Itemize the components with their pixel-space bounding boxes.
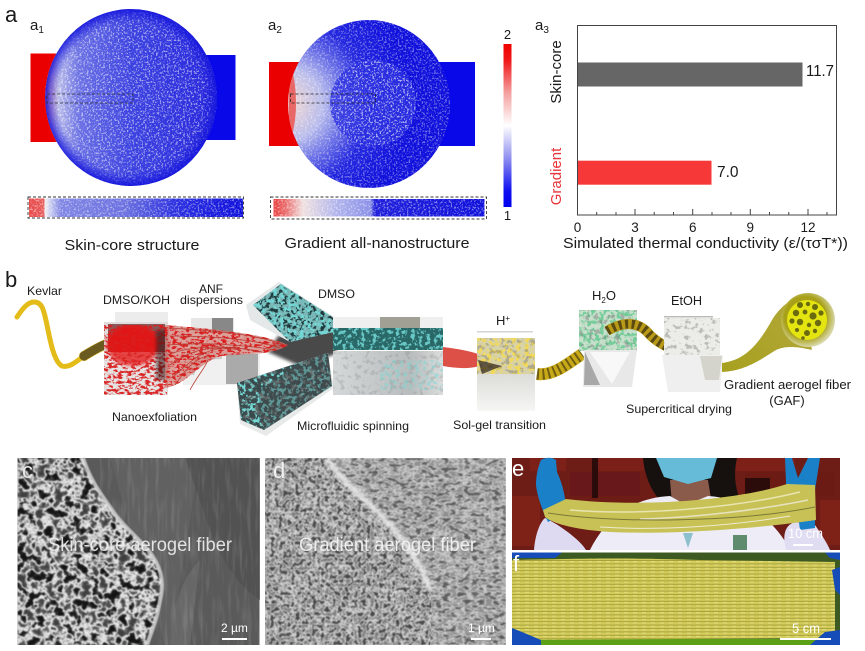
scale bar: 10 cm: 10 cm [788,526,823,541]
panel: a heading letter: a [5,2,18,27]
bright boundary [83,458,162,645]
overlay title: Gradient aerogel fiber [299,535,477,556]
colour bar: 2 [504,27,511,42]
yellow braid: water to ethanol [607,324,680,352]
Kevlar fiber [17,302,112,366]
stretched yellow fiber band [543,484,816,533]
label: Microfluidic spinning: Microfluidic spinning [297,419,409,433]
caption: skin-core: Skin-core structure [64,237,200,254]
x tick labels: 0 [574,220,581,235]
label: DMSO/KOH: DMSO/KOH [103,293,170,307]
label: GAF name: (GAF) [769,393,805,408]
gradient aerogel fiber tip [722,293,835,372]
porous core [18,458,168,645]
brick wall [512,458,840,550]
panel: a2 gradient simulation [268,17,486,252]
dashed selection box [290,94,376,103]
scale bar: 2 µm: 2 µm [221,621,248,635]
teal block: lower DMSO inlet [237,353,334,436]
disc: skin-core [45,9,217,186]
disc: gradient [288,20,450,188]
porous inner region [265,458,440,645]
yellow braid: sol-gel to water [537,354,582,374]
scale bar: 5 cm: 5 cm [792,621,820,636]
neck [670,480,712,505]
label: H2O: H [592,288,601,303]
overlay title: Skin-core aerogel fiber [48,535,233,556]
fibrous outer region [265,458,506,645]
panel: a1 skin-core simulation [28,9,244,254]
panel: c SEM skin-core [18,458,260,645]
red left electrode [269,62,309,146]
blue right electrode [200,55,236,140]
colour bar [504,27,512,223]
label: Nanoexfoliation: Nanoexfoliation [112,410,197,424]
label: a3: 3 [543,25,549,36]
x tick labels: 12 [800,220,816,235]
label: H+: + [505,314,510,323]
box: nanoexfoliation [104,312,168,395]
colour bar: 1 [504,208,511,223]
value: 7.0: 7.0 [717,164,739,181]
x tick labels: 9 [747,220,754,235]
label: H+: H [496,313,505,328]
face mask [656,458,717,484]
central dark junction [268,328,336,366]
small channel: upper ANF glass [191,318,234,333]
red nanofiber bundle [165,325,290,390]
x axis title: Simulated thermal conductivity (ε/(τσT*)) [563,235,848,252]
panel: a3 bar chart [535,17,848,252]
process labels [27,282,852,433]
right glove [785,458,820,530]
label: EtOH: EtOH [671,293,702,308]
panel: b heading letter: b [5,267,17,292]
red left electrode [30,54,70,142]
y label: skin-core: Skin-core [548,40,565,104]
label: GAF name: Gradient aerogel fiber [724,377,852,392]
panel: d SEM gradient [265,458,506,645]
letter e: e [512,456,524,481]
panel: e photo stretched fibers [512,456,840,550]
blue glove corners [512,552,840,645]
x tick labels [574,220,816,235]
bar: skin-core [578,62,802,86]
letter c: c [22,458,33,483]
woven yellow fabric [512,558,835,640]
box: sol-gel transition [477,331,535,411]
lab coat [534,496,830,550]
letter d: d [273,458,285,483]
label: H2O: O [606,288,616,303]
hair [643,458,742,505]
box: water exchange [579,310,637,387]
skin region [18,458,260,645]
panel: f photo woven fabric [512,551,840,645]
label: GAF name [724,377,852,408]
scale bar: 1 µm: 1 µm [468,621,495,635]
background [512,552,840,645]
label: Supercritical drying: Supercritical drying [626,402,732,416]
value: 11.7: 11.7 [806,63,834,80]
x tick labels: 3 [631,220,639,235]
x tick labels: 6 [689,220,696,235]
bottom green band [512,639,840,645]
label: H2O: 2 [601,296,606,305]
blue right electrode [435,62,475,146]
red gel fiber entering acid bath [443,347,500,373]
bar: gradient [578,161,712,185]
label: Kevlar: Kevlar [27,284,62,298]
box: supercritical drying [662,316,723,392]
letter f: f [513,551,520,576]
teal block: upper DMSO inlet [246,282,336,342]
y label: gradient: Gradient [548,147,565,205]
straight microfluidic channel [333,317,443,395]
label: DMSO: DMSO [318,287,355,301]
bright boundary [327,458,430,590]
label: a1: 1 [38,25,44,36]
label: Sol-gel transition: Sol-gel transition [453,418,546,432]
label: a2: a [268,17,276,34]
label: a1: a [30,17,38,34]
dashed selection box [47,94,133,103]
zoomed strip [270,197,486,219]
label: a3: a [535,17,543,34]
small channel: lower ANF glass [183,352,260,385]
caption: gradient: Gradient all-nanostructure [284,235,470,252]
panel: b process schematic [17,282,852,436]
label: ANF dispersions [180,282,243,307]
label: a2: 2 [276,25,282,36]
label: ANF dispersions: ANF [199,282,223,296]
label: ANF dispersions: dispersions [180,293,243,307]
scale bar: 5 cm [780,621,831,640]
left glove [536,458,566,522]
zoomed strip [28,197,244,218]
chart frame and ticks [578,26,836,215]
